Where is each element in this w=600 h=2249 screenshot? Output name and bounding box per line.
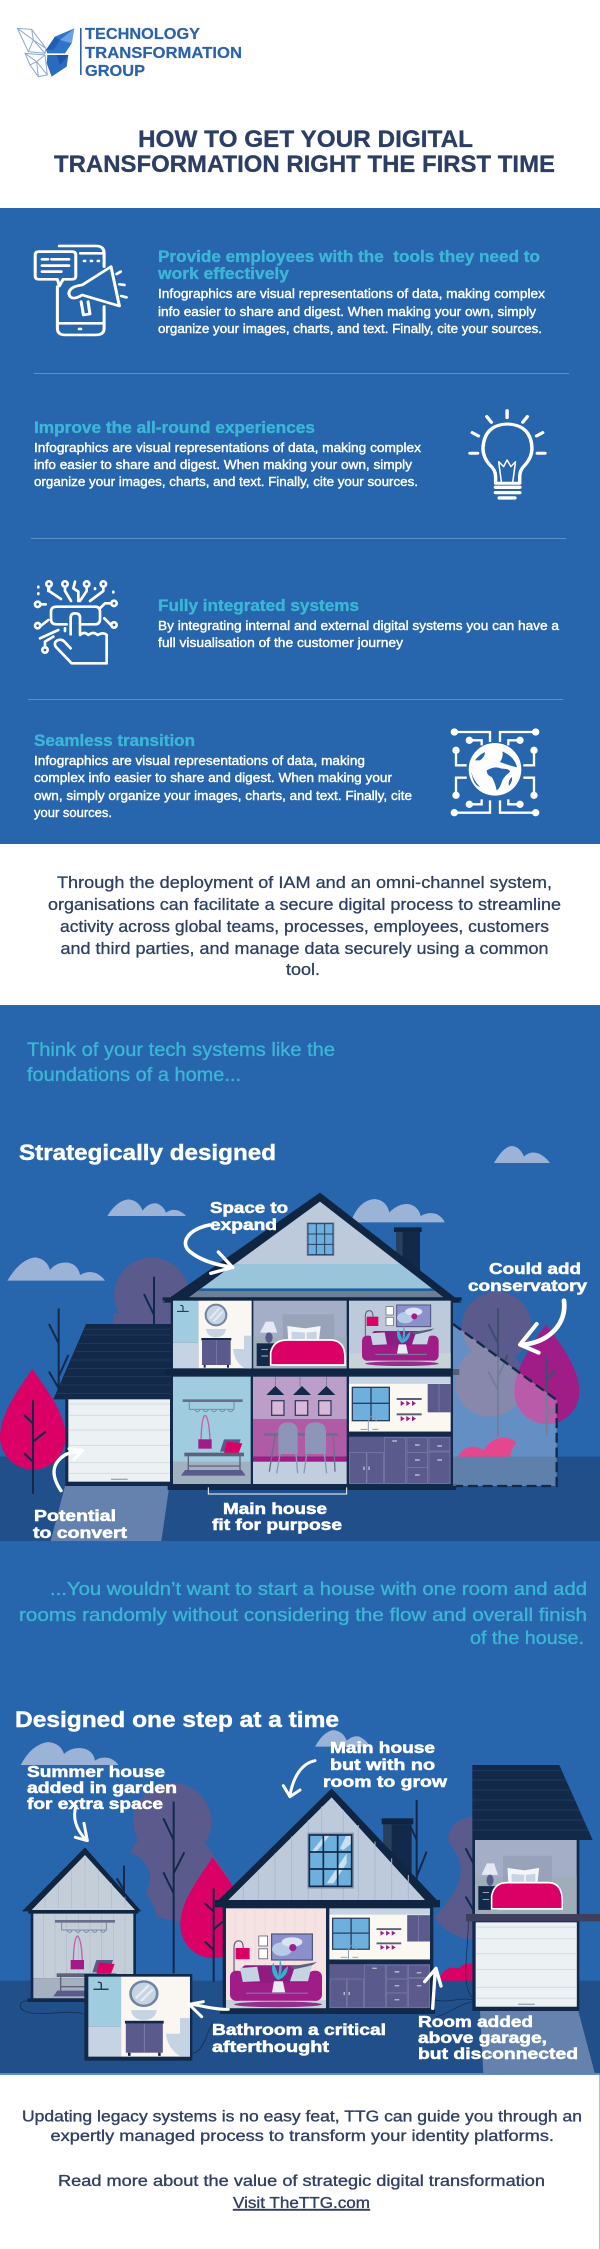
footer text — [22, 2108, 582, 2212]
room: hallway — [173, 1377, 251, 1484]
background trees — [114, 1258, 189, 1332]
text: integrated systems body: By integrating internal and external digital systems you can have a — [158, 618, 560, 633]
text: seamless transition body: own, simply organize your images, charts, and text. Finally, cite — [34, 788, 412, 803]
intro paragraph: tool. — [286, 960, 320, 979]
arrow: bathroom — [189, 2002, 228, 2017]
arrow: main house — [283, 1761, 315, 1797]
heading: experiences: Improve the all-round experiences — [34, 419, 315, 437]
intro paragraph: Through the deployment of IAM and an omni-channel system, — [57, 873, 552, 892]
roof — [163, 1193, 462, 1303]
text: experiences body: organize your images, charts, and text. Finally, cite your sources. — [34, 474, 418, 489]
footer text: Visit TheTTG.com — [233, 2195, 370, 2212]
intro paragraph: activity across global teams, processes, employees, customers — [60, 917, 549, 936]
title: TRANSFORMATION RIGHT THE FIRST TIME — [54, 151, 555, 178]
label: bathroom afterthought: Bathroom a critical — [212, 2022, 386, 2039]
label: room added above garage — [418, 2014, 578, 2063]
room: bathroom — [173, 1301, 252, 1368]
footer text: Updating legacy systems is no easy feat, TTG can guide you through an — [22, 2108, 582, 2126]
label: main house no room to grow: but with no — [330, 1757, 435, 1774]
arrow: could add conservatory — [520, 1301, 564, 1353]
chimney — [382, 1818, 413, 1881]
arrow: space to expand — [185, 1225, 233, 1273]
text: experiences body: Infographics are visual representations of data, making complex — [34, 440, 422, 455]
text: seamless transition body: your sources. — [34, 805, 112, 820]
heading: strategically designed: Strategically designed — [19, 1140, 276, 1165]
summer house — [22, 1847, 141, 2002]
ground — [0, 1981, 600, 2074]
heading: designed one step at a time: Designed one step at a time — [15, 1707, 339, 1732]
label: could add conservatory — [468, 1261, 587, 1295]
label: bathroom afterthought — [212, 2022, 386, 2056]
intro paragraph — [48, 873, 561, 979]
label: summer house — [27, 1764, 177, 1813]
label: room added above garage: Room added — [418, 2014, 533, 2031]
logo — [17, 26, 242, 80]
pink tree — [0, 1369, 66, 1469]
intro paragraph: and third parties, and manage data securely using a common — [60, 939, 548, 958]
icon: light bulb — [470, 411, 545, 498]
icon: butterfly — [17, 28, 74, 77]
label: potential to convert: to convert — [33, 1525, 128, 1542]
text: analogy intro: Think of your tech systems like the — [27, 1040, 335, 1061]
background trees — [130, 1783, 473, 1940]
text: tools body: info easier to share and digest. When making your own, simply — [158, 304, 537, 319]
driveway — [51, 1486, 169, 1541]
clouds — [21, 1730, 370, 1765]
title — [54, 126, 555, 178]
garage with room above — [466, 1765, 600, 2011]
label: room added above garage: but disconnected — [418, 2046, 578, 2063]
text: integrated systems body: full visualisation of the customer journey — [158, 635, 404, 650]
room: dining room — [253, 1377, 347, 1484]
footer text: Read more about the value of strategic digital transformation — [58, 2173, 545, 2190]
text: analogy warning — [19, 1579, 587, 1648]
text: experiences body — [34, 440, 422, 489]
label: summer house: added in garden — [27, 1780, 177, 1797]
intro paragraph: organisations can facilitate a secure digital process to streamline — [48, 895, 561, 914]
label: main house fit for purpose — [212, 1501, 342, 1534]
text: seamless transition body: complex info easier to share and digest. When making your — [34, 770, 393, 785]
text: tools body: organize your images, charts, and text. Finally, cite your sources. — [158, 321, 542, 336]
arrow: summer house — [75, 1806, 87, 1841]
footer text: expertly managed process to transform your identity platforms. — [50, 2128, 554, 2145]
text: integrated systems body — [158, 618, 560, 650]
chimney — [394, 1227, 422, 1275]
text: tools body — [158, 286, 546, 336]
bathroom box — [84, 1974, 192, 2061]
panel: house analogy — [0, 1005, 600, 2075]
ground — [0, 1457, 600, 1541]
room: living room — [349, 1301, 451, 1368]
bracket: main house — [208, 1487, 347, 1494]
label: could add conservatory: conservatory — [468, 1278, 587, 1295]
text: analogy intro: foundations of a home... — [27, 1065, 241, 1086]
label: bathroom afterthought: afterthought — [212, 2039, 330, 2056]
tree trunks — [117, 1800, 473, 1982]
room: living room — [226, 1908, 326, 2008]
icon: circuit globe — [451, 728, 539, 816]
logo: TRANSFORMATION — [85, 45, 242, 62]
illustration: piecemeal house — [0, 1730, 600, 2075]
text: analogy warning: ...You wouldn’t want to start a house with one room and add — [50, 1579, 587, 1599]
text: seamless transition body: Infographics are visual representations of data, making — [34, 753, 365, 768]
arrow: room added — [425, 1968, 441, 2008]
label: space to expand: expand — [210, 1217, 277, 1234]
label: could add conservatory: Could add — [489, 1261, 581, 1278]
logo: TECHNOLOGY — [85, 26, 200, 43]
label: main house no room to grow: room to grow — [323, 1774, 448, 1791]
text: experiences body: info easier to share and digest. When making your own, simply — [34, 457, 413, 472]
label: summer house: Summer house — [27, 1764, 165, 1781]
heading: tools line 2: work effectively — [157, 265, 290, 283]
cables — [20, 1920, 473, 2053]
main house roof — [216, 1788, 439, 1903]
label: main house no room to grow — [323, 1740, 448, 1791]
label: potential to convert: Potential — [34, 1508, 116, 1525]
title: HOW TO GET YOUR DIGITAL — [138, 126, 473, 153]
driveway — [480, 2011, 595, 2074]
room: kitchen — [329, 1908, 430, 2008]
heading: seamless transition: Seamless transition — [34, 732, 195, 750]
clouds — [7, 1146, 550, 1281]
room: kitchen — [349, 1377, 451, 1484]
label: main house no room to grow: Main house — [330, 1740, 435, 1757]
text: analogy warning: rooms randomly without considering the flow and overall finish — [19, 1605, 587, 1625]
heading: integrated systems: Fully integrated systems — [158, 597, 359, 615]
label: space to expand — [210, 1200, 288, 1234]
conservatory outline — [453, 1324, 557, 1486]
room: bedroom — [253, 1301, 347, 1368]
text: analogy intro — [27, 1040, 335, 1086]
main house structure — [223, 1903, 433, 2013]
icon: phone with megaphone — [35, 246, 126, 335]
panel: benefits — [0, 208, 600, 844]
label: potential to convert — [33, 1508, 128, 1542]
label: main house fit for purpose: Main house — [223, 1501, 327, 1518]
icon: circuit hand — [35, 581, 117, 663]
illustration: strategic house — [0, 1146, 600, 1541]
heading: tools: Provide employees with the tools they need to — [158, 248, 540, 266]
label: space to expand: Space to — [210, 1200, 288, 1217]
label: room added above garage: above garage, — [418, 2030, 547, 2047]
label: main house fit for purpose: fit for purpose — [212, 1517, 342, 1534]
garage — [53, 1324, 172, 1486]
house structure — [171, 1297, 453, 1487]
tree trunks — [49, 1277, 556, 1437]
text: seamless transition body — [34, 753, 412, 820]
arrow: potential to convert — [54, 1449, 83, 1491]
text: analogy warning: of the house. — [470, 1628, 584, 1648]
text: tools body: Infographics are visual representations of data, making complex — [158, 286, 546, 301]
logo: GROUP — [85, 63, 145, 80]
label: summer house: for extra space — [27, 1796, 163, 1813]
